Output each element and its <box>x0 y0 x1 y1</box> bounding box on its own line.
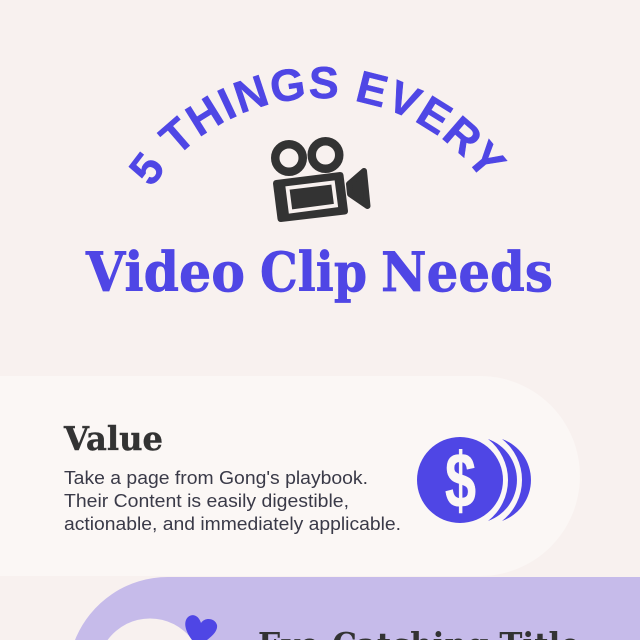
main title <box>85 240 553 304</box>
main title: Video <box>85 240 245 304</box>
arched heading: 5 THINGS EVERY <box>128 66 508 184</box>
icon: film camera <box>273 141 368 222</box>
value description <box>64 468 401 534</box>
panel: eye-catching title <box>75 577 640 640</box>
value description: Take a page from Gong's playbook. <box>64 468 368 488</box>
icon: dollar coins <box>417 436 531 524</box>
main title: Clip <box>260 240 367 304</box>
icon: heart <box>185 615 217 640</box>
icon: dollar coins: $ <box>445 436 476 524</box>
heading: value: Value <box>63 419 163 458</box>
panel: value <box>0 376 580 576</box>
main title: Needs <box>381 240 553 304</box>
image circle <box>108 618 192 640</box>
value description: actionable, and immediately applicable. <box>64 514 401 534</box>
value description: Their Content is easily digestible, <box>64 491 349 511</box>
